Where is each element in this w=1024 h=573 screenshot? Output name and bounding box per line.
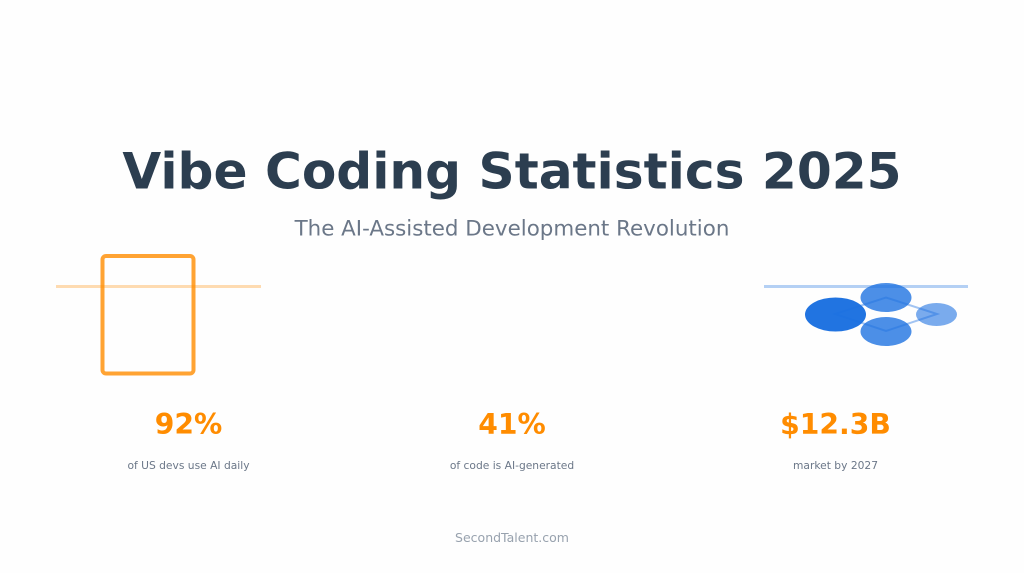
- stat: 41%: [450, 408, 574, 472]
- subtitle: The AI-Assisted Development Revolution: [294, 216, 729, 242]
- title: Vibe Coding Statistics 2025: [122, 142, 902, 200]
- stat: 92%: of US devs use AI daily: [127, 459, 250, 472]
- stat: $12.3B: [780, 408, 891, 472]
- stat: 92%: [127, 408, 250, 472]
- stat: $12.3B: market by 2027: [793, 459, 878, 472]
- stat: $12.3B: $12.3B: [780, 408, 891, 441]
- icon: orange device outline with line: [56, 256, 261, 374]
- icon: blue network diagram with line: [764, 283, 968, 346]
- stat: 92%: 92%: [155, 408, 222, 441]
- footer source: SecondTalent.com: [455, 530, 569, 545]
- stat: 41%: of code is AI-generated: [450, 459, 574, 472]
- stat: 41%: 41%: [478, 408, 546, 441]
